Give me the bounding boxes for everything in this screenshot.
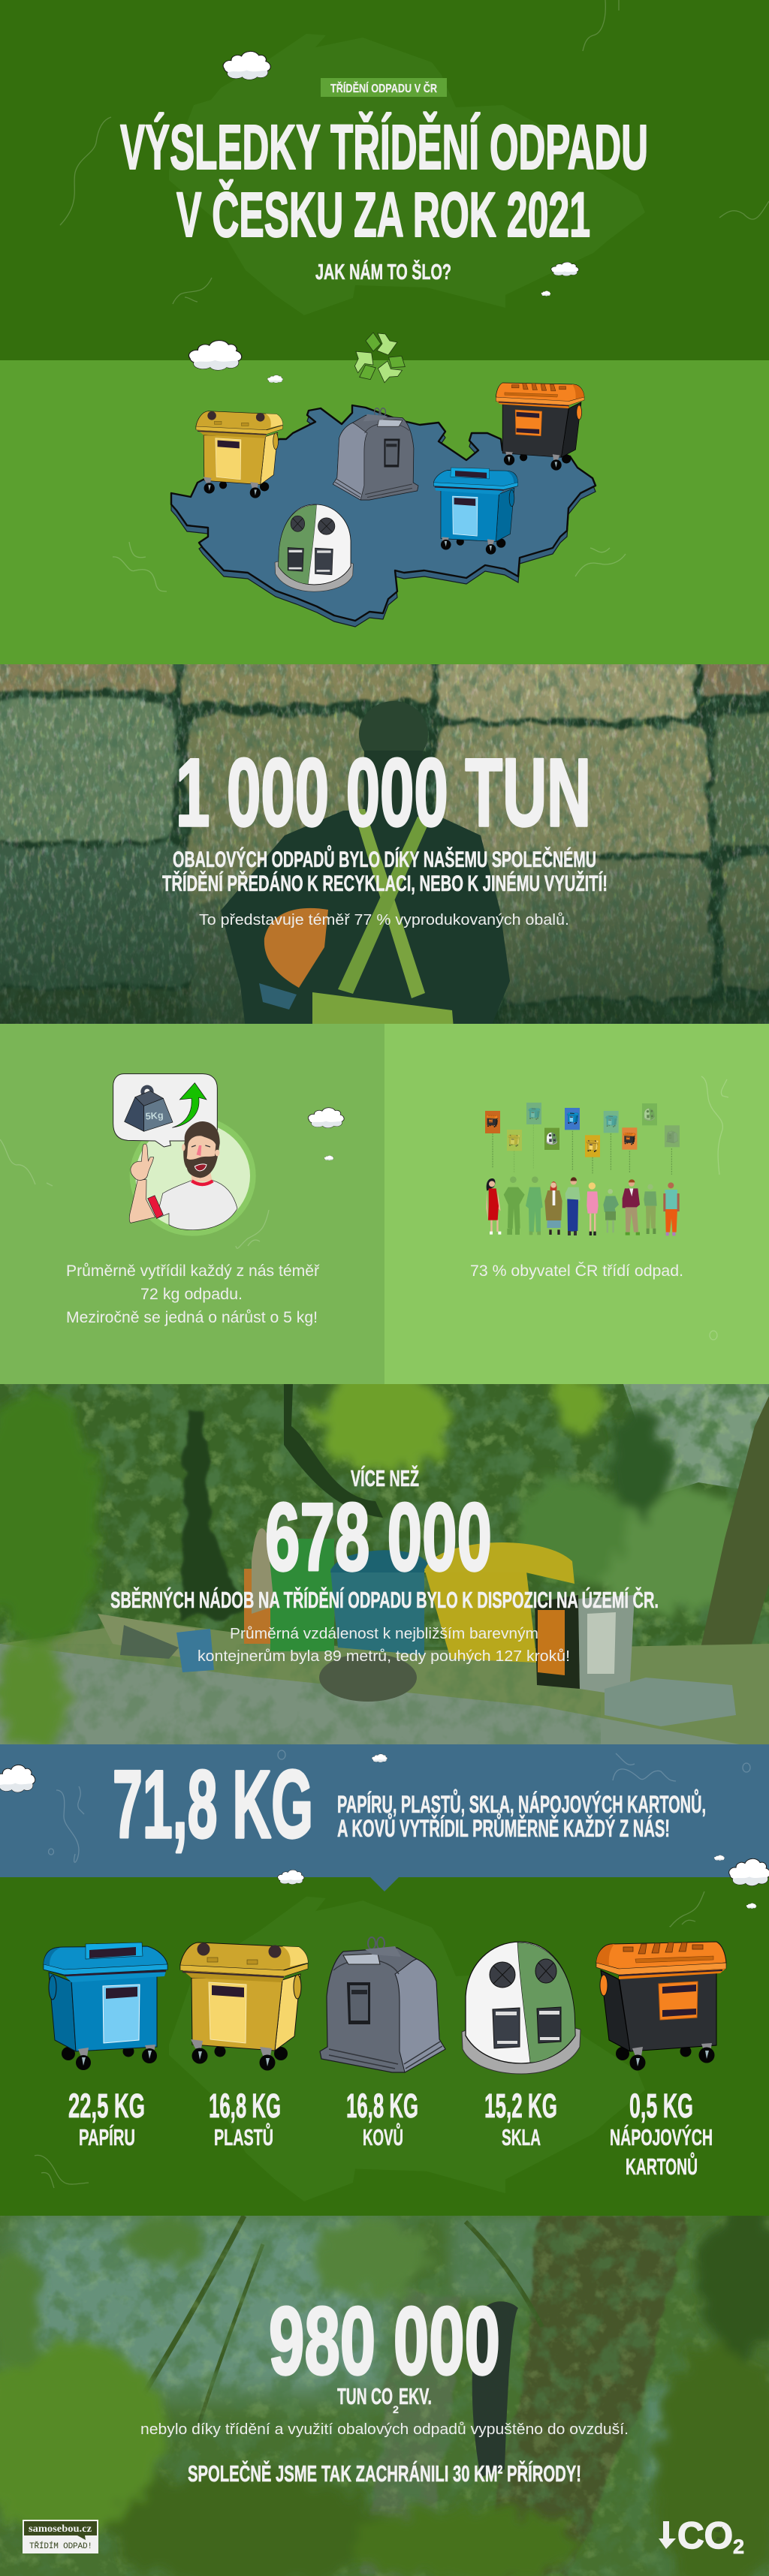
panel: 71,8 kg banner xyxy=(0,1744,769,1891)
title xyxy=(120,112,648,250)
icon: orange carton container xyxy=(496,383,584,471)
description: nebylo díky třídění a využití obalových odpadů vypuštěno do ovzduší. xyxy=(140,2421,629,2438)
person: faded boy xyxy=(603,1189,619,1232)
icon: glass container xyxy=(275,504,353,591)
panel: CO2 savings photo xyxy=(0,2207,769,2576)
container column: plastics xyxy=(180,1943,308,2150)
unit: TUN CO xyxy=(337,2383,393,2409)
icon: tiny cloud xyxy=(746,1903,756,1909)
illustration: man with speech bubble: 5Kg xyxy=(145,1110,164,1122)
person: faded older man xyxy=(644,1184,657,1234)
illustration: man with speech bubble xyxy=(113,1074,256,1236)
description xyxy=(162,845,608,896)
container column: plastics: 16,8 KG xyxy=(209,2087,281,2125)
subtitle: JAK NÁM TO ŠLO? xyxy=(315,259,451,284)
photo: woodpecker in forest xyxy=(0,2207,769,2576)
unit xyxy=(337,2388,431,2414)
note: kontejnerům byla 89 metrů, tedy pouhých 127 kroků! xyxy=(198,1648,570,1665)
icon: cloud large xyxy=(223,51,270,80)
big number: 678 000 xyxy=(265,1484,492,1591)
icon: small cloud xyxy=(267,375,283,383)
panel: map with containers xyxy=(0,333,769,664)
icon: cloud right xyxy=(729,1858,769,1885)
lead-in: VÍCE NEŽ xyxy=(351,1464,419,1491)
icon: recycling symbol xyxy=(348,333,409,387)
container column: paper: 22,5 KG xyxy=(68,2087,145,2125)
big number: 71,8 KG xyxy=(113,1751,313,1858)
icon: cloud left xyxy=(0,1765,35,1792)
person: woman in red dress xyxy=(486,1178,501,1235)
icon: yellow plastic container xyxy=(196,411,283,498)
icon: blue paper container xyxy=(433,468,518,555)
logo: samosebou.cz: samosebou.cz xyxy=(29,2523,92,2534)
icon: cloud small top xyxy=(372,1754,388,1762)
text: average per person: Průměrně vytřídil každý z nás téměř xyxy=(66,1262,320,1280)
panel: title header xyxy=(0,0,769,360)
description xyxy=(337,1789,706,1842)
panel: containers photo xyxy=(0,1370,769,1749)
logo: less CO2: CO xyxy=(677,2514,733,2556)
icon: tiny cloud xyxy=(324,1155,333,1160)
logo: less CO2: 2 xyxy=(733,2535,744,2558)
container column: glass xyxy=(462,1942,581,2150)
panel: per person increase xyxy=(0,1024,384,1384)
panel: population sorting xyxy=(384,1024,769,1384)
text: average per person xyxy=(66,1262,320,1326)
icon: cloud small xyxy=(551,262,579,276)
text: average per person: Meziročně se jedná o nárůst o 5 kg! xyxy=(66,1309,318,1326)
logo: less CO2 xyxy=(659,2521,743,2553)
logo: samosebou.cz: TŘÍDÍM ODPAD! xyxy=(29,2541,92,2551)
container column: metals: 16,8 KG xyxy=(346,2087,418,2125)
unit: EKV. xyxy=(399,2383,432,2409)
person: man in maroon blazer xyxy=(623,1179,640,1235)
big number: 980 000 xyxy=(269,2288,500,2395)
container column: cartons: 0,5 KG xyxy=(629,2087,693,2125)
note xyxy=(198,1625,570,1665)
person: man in orange trousers xyxy=(663,1182,680,1235)
icon: cloud xyxy=(308,1108,344,1128)
tag: section label xyxy=(321,78,447,97)
photo: containers in a park xyxy=(0,1370,769,1749)
container column: plastics: PLASTŮ xyxy=(214,2122,273,2150)
person: faded man in suit xyxy=(504,1176,525,1235)
tag: section label: TŘÍDĚNÍ ODPADU V ČR xyxy=(330,81,437,95)
people with container cards xyxy=(485,1103,680,1235)
person: blonde woman in pink xyxy=(587,1182,599,1235)
unit: 2 xyxy=(393,2403,399,2415)
panel: one million tonnes photo xyxy=(0,653,769,1042)
panel: containers breakdown xyxy=(0,1877,769,2216)
container column: cartons: KARTONŮ xyxy=(626,2151,698,2180)
container column: glass: SKLA xyxy=(502,2124,541,2150)
note: To představuje téměř 77 % vyprodukovaných obalů. xyxy=(199,911,569,928)
container column: paper xyxy=(44,1943,167,2150)
person: woman in coat xyxy=(544,1181,562,1235)
container column: cartons xyxy=(596,1942,726,2180)
container column: metals: KOVŮ xyxy=(363,2122,403,2150)
text: share of population: 73 % obyvatel ČR třídí odpad. xyxy=(470,1262,683,1280)
note: Průměrná vzdálenost k nejbližším barevným xyxy=(230,1625,538,1642)
text: average per person: 72 kg odpadu. xyxy=(140,1286,243,1303)
person: faded man in overalls xyxy=(526,1176,543,1235)
photo: baled plastic and worker xyxy=(0,653,769,1042)
person: woman in blue trousers xyxy=(565,1177,581,1235)
icon: gray metal container xyxy=(333,408,418,500)
container column: metals xyxy=(320,1937,445,2150)
icon: cloud on boundary xyxy=(278,1870,304,1884)
container column: paper: PAPÍRU xyxy=(79,2124,135,2150)
map of Czechia xyxy=(171,405,596,627)
logo: samosebou.cz xyxy=(23,2520,98,2553)
container column: cartons: NÁPOJOVÝCH xyxy=(610,2124,713,2150)
container column: glass: 15,2 KG xyxy=(484,2087,557,2125)
icon: cloud on boundary xyxy=(188,341,242,370)
icon: tiny cloud right xyxy=(714,1855,725,1861)
icon: cloud tiny xyxy=(541,290,550,296)
